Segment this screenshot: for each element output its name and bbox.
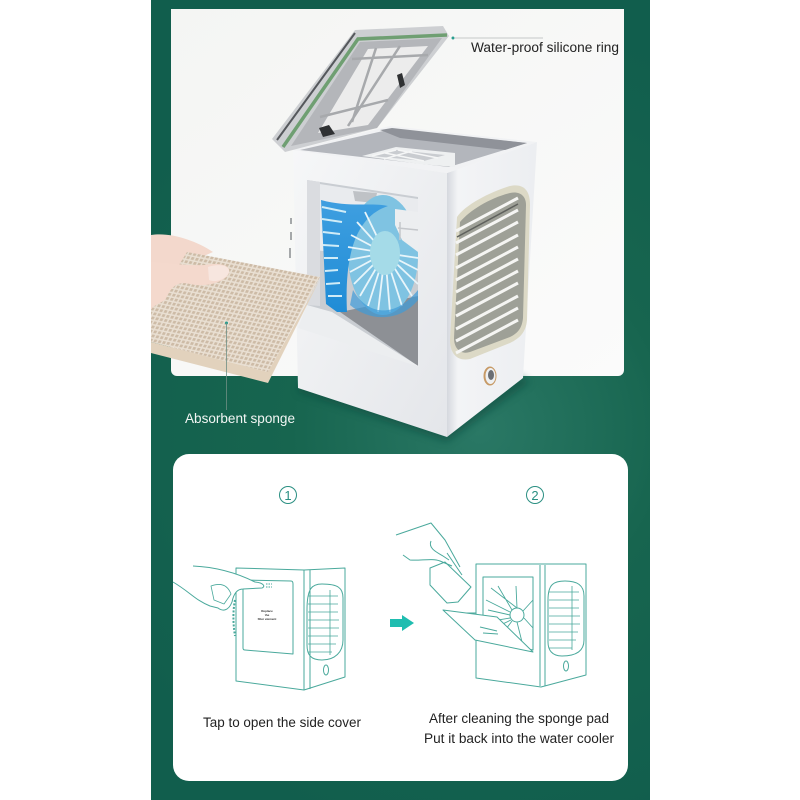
step 1 number: 1 — [284, 488, 292, 503]
small cover text: Replace — [261, 609, 273, 613]
thumb — [151, 262, 229, 308]
step 2 number: 2 — [531, 488, 539, 503]
step 1 number — [280, 486, 296, 504]
power button — [324, 665, 328, 675]
cooler shadow — [298, 376, 530, 442]
small cover text: the — [265, 613, 270, 617]
step 1 line drawing — [173, 566, 345, 690]
blue fan wheel — [321, 195, 418, 317]
green background panel — [151, 0, 650, 800]
lid with silicone ring — [272, 26, 449, 152]
callout: silicone ring leader — [452, 36, 543, 40]
cooler outline — [476, 564, 586, 687]
arrow between steps — [390, 615, 414, 631]
hand behind sponge — [151, 234, 213, 310]
hand — [173, 566, 264, 610]
sponge pad — [430, 562, 471, 603]
side button marks — [290, 218, 291, 258]
caption: step 2 line 2: Put it back into the water cooler — [424, 731, 614, 746]
vent — [548, 581, 584, 656]
side vent with slats — [450, 185, 530, 360]
thumb nail — [208, 265, 229, 281]
instruction card — [173, 454, 628, 781]
hand holding sponge — [151, 234, 321, 383]
side cover — [243, 580, 293, 654]
callout: absorbent sponge leader — [225, 322, 228, 410]
cooler body side — [447, 142, 537, 437]
vent — [307, 584, 343, 660]
cooler body front — [293, 150, 447, 437]
digital display button — [484, 366, 496, 386]
caption: step 2 line 1: After cleaning the sponge pad — [429, 711, 609, 726]
label: silicone ring: Water-proof silicone ring — [471, 40, 619, 55]
step 2 number — [526, 486, 544, 504]
cooler outline — [236, 568, 345, 690]
open cover — [443, 610, 533, 652]
window and fan — [483, 577, 533, 650]
open top with water tank — [293, 126, 537, 173]
white top photo panel — [171, 9, 624, 376]
power button — [564, 661, 568, 671]
open side window with fan — [307, 180, 418, 366]
small cover text — [258, 609, 276, 621]
caption: step 1: Tap to open the side cover — [203, 715, 361, 730]
small cover text: filter element — [258, 617, 276, 621]
step 2 line drawing — [396, 523, 586, 687]
label: absorbent sponge: Absorbent sponge — [185, 411, 295, 426]
open side flap — [298, 305, 420, 367]
absorbent sponge — [151, 252, 321, 383]
hand — [396, 523, 462, 575]
product photo: water cooler — [272, 26, 537, 442]
